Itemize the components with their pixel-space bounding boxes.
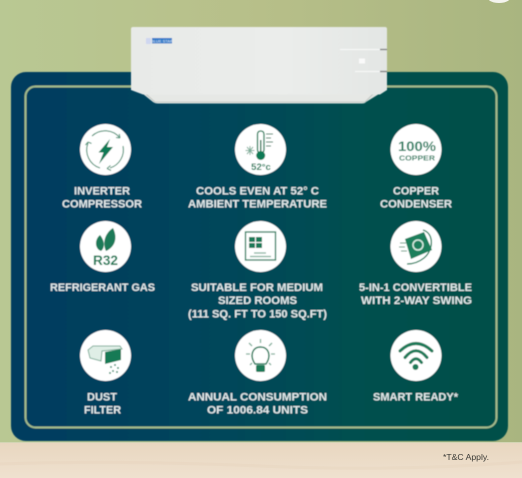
icon: wifi <box>390 330 442 381</box>
label: inverter compressor: INVERTER <box>74 186 130 198</box>
label: dust filter <box>84 392 121 416</box>
label: cools even: AMBIENT TEMPERATURE <box>188 198 327 210</box>
label: room size: SUITABLE FOR MEDIUM <box>191 282 323 294</box>
feature: dust filter <box>80 330 131 416</box>
icon: dust filter <box>80 330 131 381</box>
label: convertible <box>359 282 472 307</box>
feature: annual consumption <box>188 330 327 416</box>
feature: convertible <box>359 221 472 307</box>
label: convertible: WITH 2-WAY SWING <box>361 295 472 307</box>
label: annual consumption: ANNUAL CONSUMPTION <box>188 392 327 404</box>
label: inverter compressor <box>62 186 142 210</box>
feature: refrigerant gas <box>50 221 155 294</box>
icon: thermometer: 52°c <box>251 162 271 173</box>
icon: room <box>235 221 286 272</box>
label: copper condenser: CONDENSER <box>380 198 452 210</box>
label: room size: (111 SQ. FT TO 150 SQ.FT) <box>188 308 327 320</box>
label: cools even <box>188 186 327 210</box>
icon: light bulb <box>235 330 286 381</box>
brand logo: BLUE STAR <box>151 38 173 44</box>
label: dust filter: FILTER <box>84 404 121 416</box>
feature: inverter compressor <box>62 124 142 210</box>
icon: 100% copper <box>390 124 442 175</box>
wooden floor <box>0 442 522 478</box>
label: annual consumption: OF 1006.84 UNITS <box>207 404 308 416</box>
feature: copper condenser <box>380 124 452 210</box>
icon: 5-in-1 swing <box>390 221 442 272</box>
label: convertible: 5-IN-1 CONVERTIBLE <box>359 282 472 294</box>
footnote: *T&C Apply. <box>443 452 489 462</box>
feature: room size <box>188 221 327 320</box>
label: copper condenser <box>380 186 452 210</box>
label: smart ready: SMART READY* <box>373 392 459 404</box>
icon: inverter compressor <box>80 124 131 175</box>
label: dust filter: DUST <box>87 392 117 404</box>
corner highlight <box>488 0 510 3</box>
brand logo <box>146 38 173 44</box>
feature: smart ready <box>373 330 459 404</box>
label: copper condenser: COPPER <box>393 186 439 198</box>
icon: 100% copper: 100% <box>398 139 436 154</box>
icon: R32 leaves: R32 <box>93 252 118 268</box>
icon: 100% copper: COPPER <box>399 154 436 162</box>
feature: cools at 52 <box>188 124 327 210</box>
label: room size <box>188 282 327 320</box>
air conditioner <box>131 27 387 104</box>
label: annual consumption <box>188 392 327 416</box>
label: cools even: COOLS EVEN AT 52° C <box>196 186 319 198</box>
panel: features <box>11 72 508 441</box>
display vents <box>340 50 387 72</box>
label: room size: SIZED ROOMS <box>218 295 297 307</box>
label: refrigerant gas: REFRIGERANT GAS <box>50 282 155 294</box>
label: inverter compressor: COMPRESSOR <box>62 198 142 210</box>
